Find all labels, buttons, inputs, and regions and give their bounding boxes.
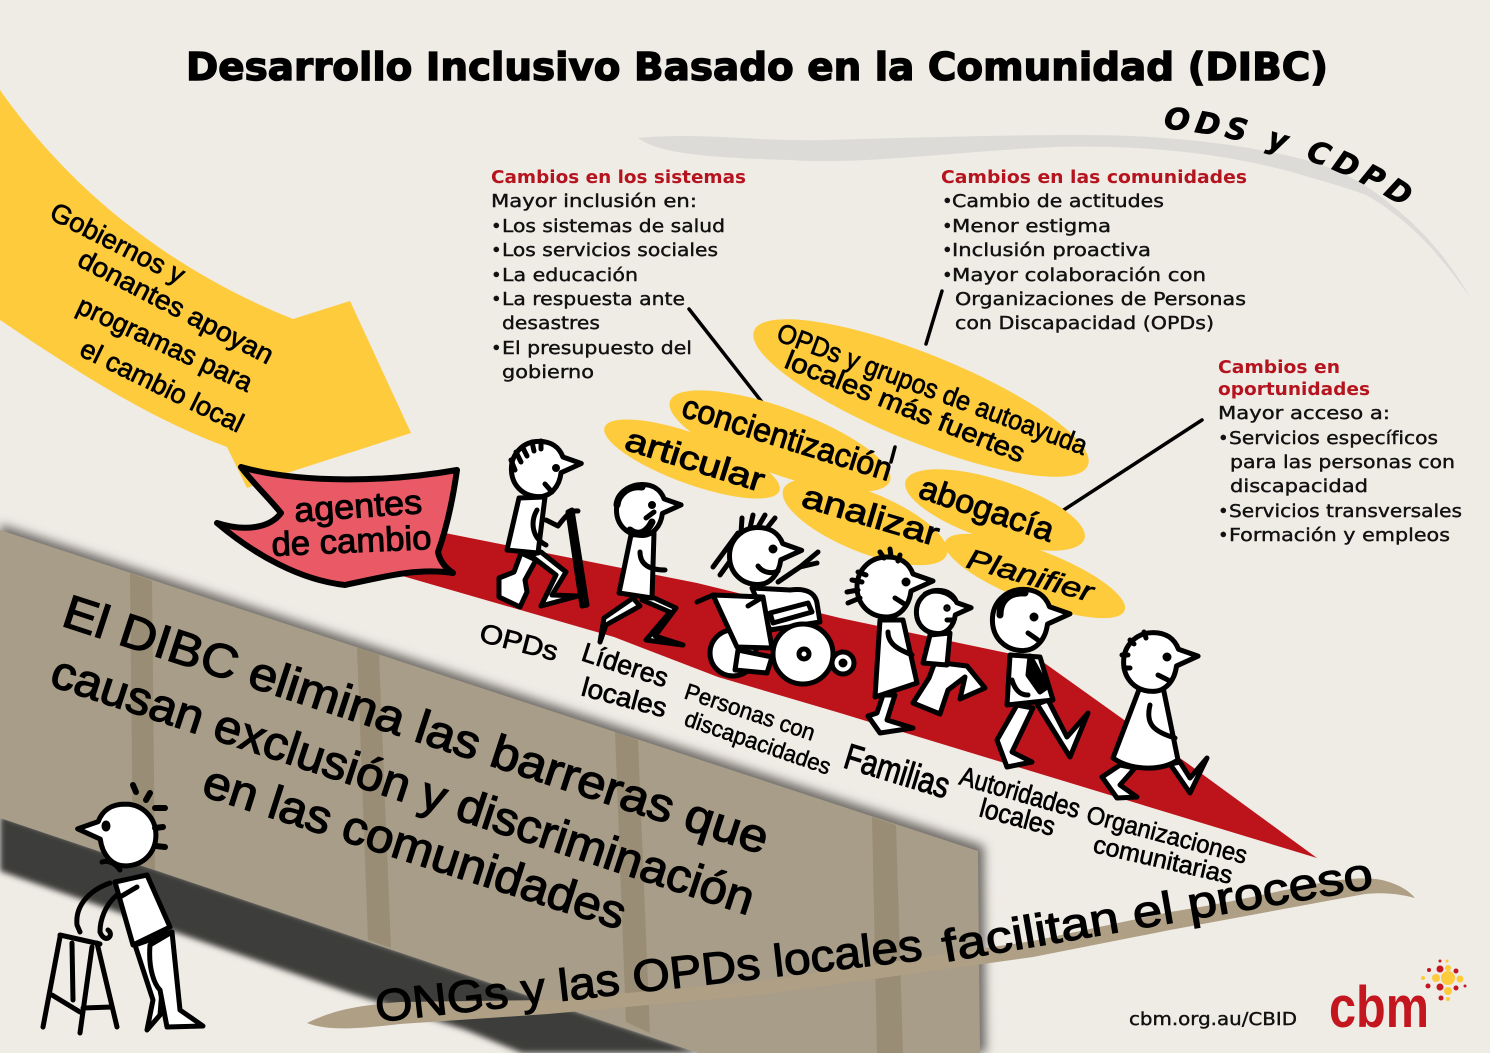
text block: community changes: Mayor colaboración con	[952, 265, 1206, 286]
bubble: OPDs stronger: locales más fuertes	[781, 345, 1029, 468]
figure: mother	[847, 549, 933, 733]
yellow arrow: funding: el cambio local	[75, 333, 249, 438]
brush stroke under facilitators text	[307, 878, 1415, 1028]
bubble: articular: articular	[621, 420, 769, 499]
text block: community changes: Cambio de actitudes	[952, 191, 1164, 212]
text block: opportunity changes: •	[1218, 501, 1229, 522]
bubble: concientización: concientización	[678, 387, 897, 488]
text block: community changes: con Discapacidad (OPDs)	[955, 313, 1214, 334]
flag: agentes de cambio: de cambio	[271, 519, 432, 564]
text block: system changes	[491, 167, 746, 383]
facilitators text	[372, 847, 1376, 1032]
dark ground shadow band	[0, 815, 702, 1053]
road labels: OPDs	[476, 618, 561, 667]
curved label: ODS y CDPD: ODS y CDPD	[1164, 107, 1412, 202]
flag: agentes de cambio	[217, 467, 457, 585]
text block: system changes: La educación	[502, 265, 638, 286]
flag: agentes de cambio: agentes	[293, 483, 423, 530]
cbm logo: cbm	[1329, 975, 1429, 1040]
figure: local authority	[992, 589, 1088, 767]
bubble: abogacía: abogacía	[915, 469, 1060, 549]
text block: system changes: Los servicios sociales	[502, 240, 718, 261]
figure: community woman	[1102, 632, 1207, 798]
text block: community changes: •	[942, 240, 953, 261]
bubble: analizar: analizar	[798, 477, 944, 553]
yellow arrow: funding: Gobiernos y	[45, 197, 190, 290]
text block: opportunity changes: oportunidades	[1218, 379, 1370, 400]
road labels: discapacidades	[681, 705, 835, 780]
wall text: en las comunidades	[197, 754, 633, 939]
text block: system changes: Los sistemas de salud	[502, 216, 725, 237]
road labels: Familias	[840, 735, 955, 806]
text block: system changes: gobierno	[502, 362, 594, 383]
text block: opportunity changes: Formación y empleos	[1229, 525, 1450, 546]
text block: system changes: El presupuesto del	[502, 338, 692, 359]
figure: person with cane	[499, 441, 587, 607]
text block: system changes: •	[491, 289, 502, 310]
bubble: OPDs stronger	[738, 290, 1104, 506]
text block: opportunity changes	[1218, 357, 1462, 546]
text block: opportunity changes: Servicios transversales	[1229, 501, 1462, 522]
road labels: locales	[976, 793, 1059, 842]
wall text: causan exclusión y discriminación	[45, 644, 762, 925]
text block: opportunity changes: discapacidad	[1230, 476, 1368, 497]
yellow arrow: funding: programas para	[72, 290, 258, 398]
bubble: OPDs stronger: OPDs y grupos de autoayuda	[773, 318, 1092, 461]
website url: cbm.org.au/CBID	[1129, 1009, 1297, 1030]
figure: excluded man with walker	[43, 785, 203, 1033]
text block: system changes: desastres	[502, 313, 600, 334]
wall shadow	[0, 524, 986, 1053]
bubble: analizar	[772, 461, 958, 583]
bubble: abogacía	[896, 452, 1094, 568]
text block: system changes: •	[491, 216, 502, 237]
text block: community changes: Inclusión proactiva	[952, 240, 1151, 261]
text block: system changes: •	[491, 338, 502, 359]
text block: community changes: Cambios en las comunidades	[941, 167, 1247, 188]
text block: community changes: •	[942, 191, 953, 212]
road labels	[476, 618, 1250, 890]
yellow arrow: funding	[0, 90, 411, 488]
facilitators text: facilitan el proceso	[938, 847, 1376, 972]
yellow arrow: funding: donantes apoyan	[73, 244, 279, 370]
bubble: Planifier: Planifier	[963, 543, 1099, 608]
figure: local leader	[600, 484, 683, 645]
text block: community changes	[941, 167, 1247, 334]
text block: system changes: •	[491, 240, 502, 261]
text block: system changes: La respuesta ante	[502, 289, 685, 310]
facilitators text: ONGs y las OPDs locales	[372, 919, 925, 1032]
figure: wheelchair user	[697, 515, 854, 684]
text block: community changes: Organizaciones de Personas	[955, 289, 1246, 310]
road labels: comunitarias	[1091, 831, 1235, 890]
road labels: locales	[578, 672, 670, 723]
road labels: Personas con	[681, 678, 819, 746]
wall: barriers	[0, 530, 980, 1053]
text block: opportunity changes: •	[1218, 525, 1229, 546]
figure: child head	[916, 590, 971, 634]
grey swoosh	[638, 135, 1470, 297]
connector lines from text to bubbles	[689, 291, 1202, 515]
road labels: Líderes	[578, 637, 672, 693]
text block: opportunity changes: Servicios específicos	[1229, 428, 1438, 449]
title: Desarrollo Inclusivo Basado en la Comunidad (DIBC)	[186, 45, 1328, 89]
text block: community changes: Menor estigma	[952, 216, 1111, 237]
text block: community changes: •	[942, 265, 953, 286]
text block: opportunity changes: Cambios en	[1218, 357, 1340, 378]
text block: system changes: Cambios en los sistemas	[491, 167, 746, 188]
text block: community changes: •	[942, 216, 953, 237]
bubble: articular	[596, 404, 788, 514]
road labels: Organizaciones	[1083, 801, 1250, 870]
text block: system changes: •	[491, 265, 502, 286]
wall text: El DIBC elimina las barreras que	[57, 584, 776, 864]
text block: opportunity changes: •	[1218, 428, 1229, 449]
text block: opportunity changes: Mayor acceso a:	[1218, 403, 1390, 424]
red road	[399, 533, 1317, 858]
bubble: concientización	[659, 370, 901, 512]
bubble: Planifier	[936, 517, 1134, 635]
road labels: Autoridades	[956, 761, 1084, 824]
text block: system changes: Mayor inclusión en:	[491, 191, 697, 212]
figure: child	[913, 633, 985, 714]
text block: opportunity changes: para las personas con	[1230, 452, 1455, 473]
